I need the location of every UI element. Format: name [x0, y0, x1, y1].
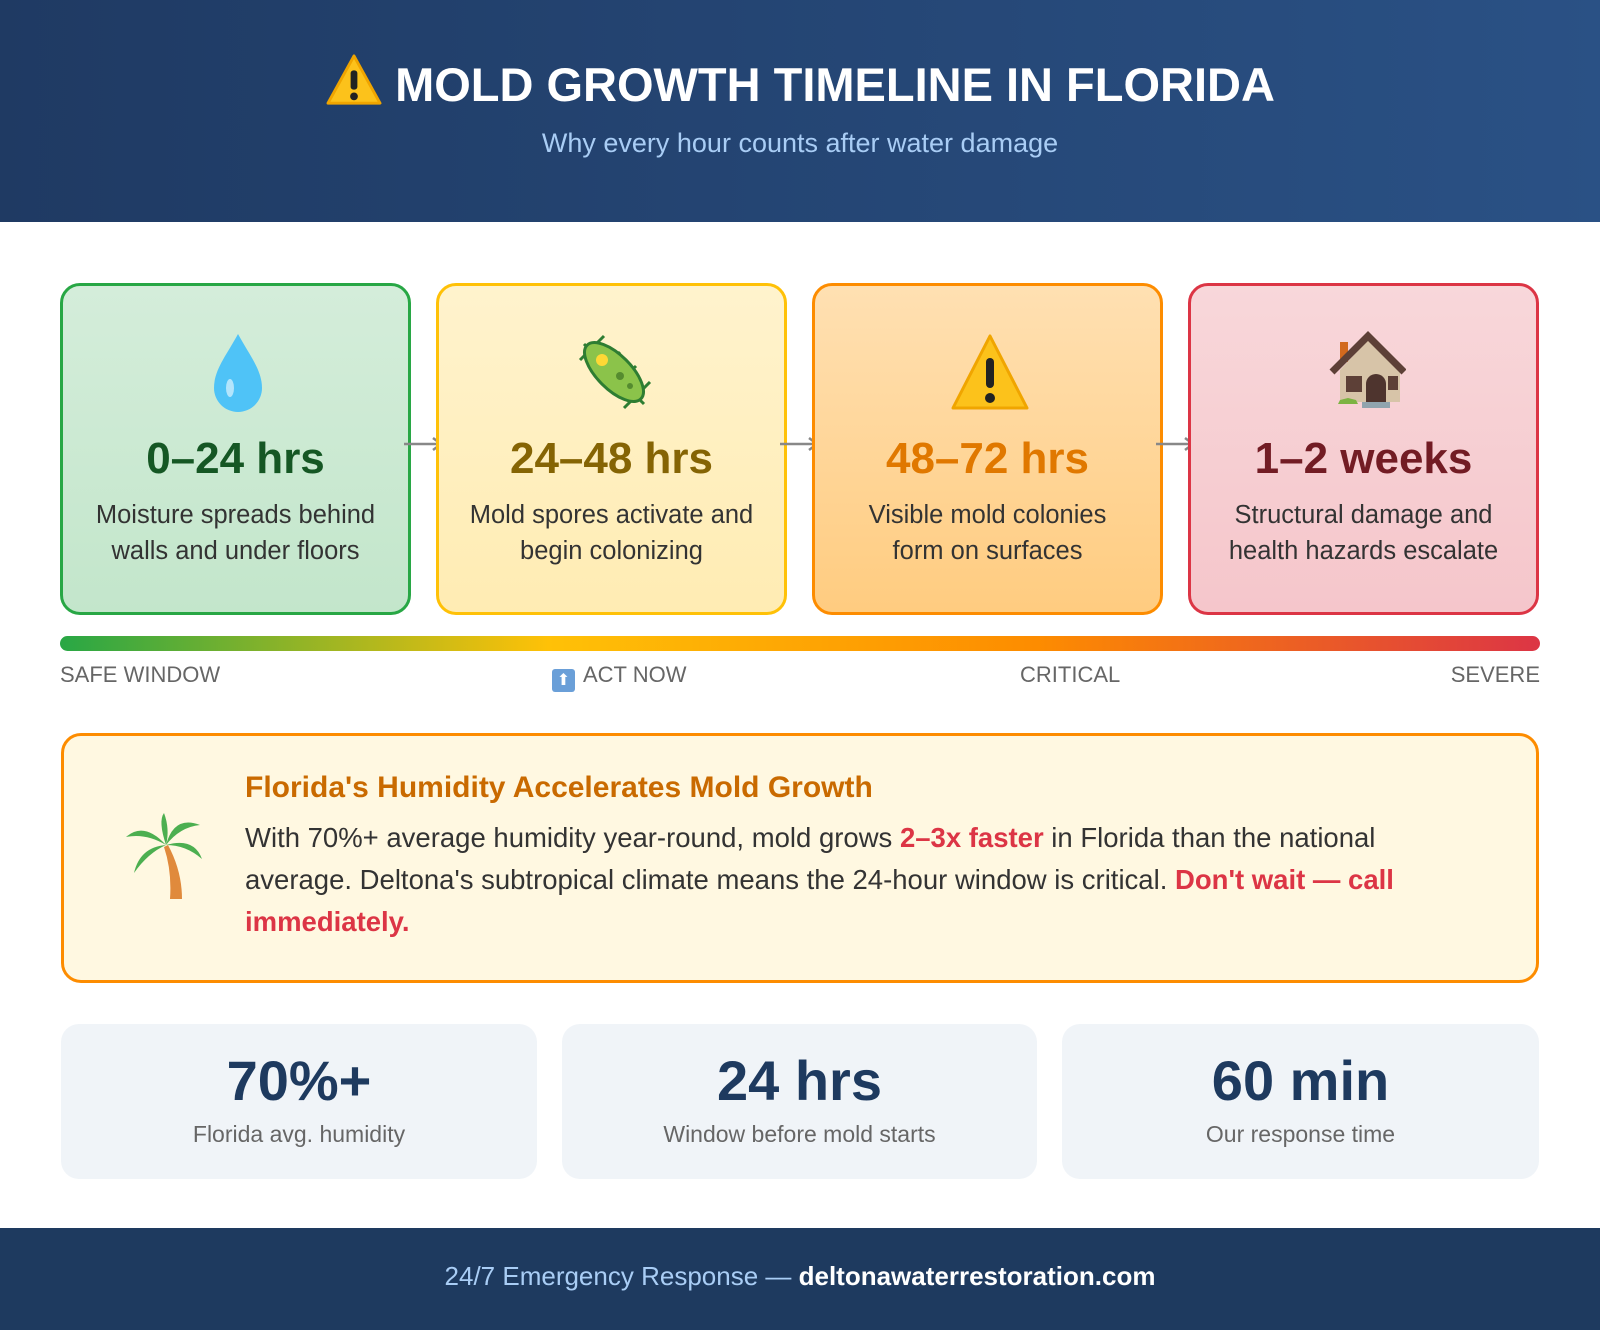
label: act now: [552, 662, 686, 692]
card: 24-48 hrs: begin colonizing: [520, 537, 703, 565]
card: 1-2 weeks: [1188, 283, 1539, 615]
label: safe window: SAFE WINDOW: [60, 662, 220, 687]
stat: response: Our response time: [1206, 1121, 1395, 1147]
callout body: With 70%+ average humidity year-round, mold grows 2–3x faster in Florida than the national average. Deltona's subtropical climate means the 24-hour window is critical. Don't wait — call immediately.: [245, 822, 1394, 937]
icon: water drop: [214, 334, 262, 412]
footer: [0, 1228, 1600, 1330]
callout: humidity: [61, 733, 1539, 983]
stat: response: 60 min: [1212, 1049, 1389, 1112]
stat: response: [1062, 1024, 1539, 1179]
label: severe: SEVERE: [1451, 662, 1540, 687]
label: act now: ACT NOW: [583, 662, 686, 687]
card: 0-24 hrs: [60, 283, 411, 615]
stat: humidity: 70%+: [227, 1049, 371, 1112]
title: MOLD GROWTH TIMELINE IN FLORIDA: [395, 58, 1275, 111]
card: 48-72 hrs: [812, 283, 1163, 615]
icon: microbe: [579, 335, 651, 409]
card: 48-72 hrs: form on surfaces: [893, 537, 1082, 565]
card: 24-48 hrs: 24–48 hrs: [510, 434, 713, 483]
callout heading: Florida's Humidity Accelerates Mold Growth: [245, 771, 873, 804]
icon: damaged house: [1330, 331, 1406, 408]
card: 24-48 hrs: Mold spores activate and: [470, 501, 753, 529]
card: 48-72 hrs: Visible mold colonies: [869, 501, 1106, 529]
card: 24-48 hrs: [436, 283, 787, 615]
severity gradient bar: [60, 636, 1540, 651]
subtitle: Why every hour counts after water damage: [542, 128, 1058, 158]
card: 1-2 weeks: health hazards escalate: [1229, 537, 1498, 565]
card: 1-2 weeks: 1–2 weeks: [1255, 434, 1472, 483]
icon: palm tree: [126, 813, 202, 899]
icon: warning: [952, 334, 1028, 410]
card: 0-24 hrs: 0–24 hrs: [146, 434, 325, 483]
stat: humidity: Florida avg. humidity: [193, 1121, 405, 1147]
stat: humidity: [61, 1024, 537, 1179]
stat: window: [562, 1024, 1037, 1179]
card: 1-2 weeks: Structural damage and: [1234, 501, 1492, 529]
card: 48-72 hrs: 48–72 hrs: [886, 434, 1089, 483]
header: [0, 0, 1600, 222]
label: act now: ⬆: [557, 672, 570, 689]
card: 0-24 hrs: Moisture spreads behind: [96, 501, 375, 529]
footer: 24/7 Emergency Response — deltonawaterrestoration.com: [445, 1261, 1155, 1291]
arrow: [1156, 437, 1188, 451]
card: 0-24 hrs: walls and under floors: [111, 537, 360, 565]
arrow: [780, 437, 812, 451]
stat: window: Window before mold starts: [663, 1121, 936, 1147]
stat: window: 24 hrs: [717, 1049, 882, 1112]
arrow: [404, 437, 436, 451]
label: critical: CRITICAL: [1020, 662, 1120, 687]
